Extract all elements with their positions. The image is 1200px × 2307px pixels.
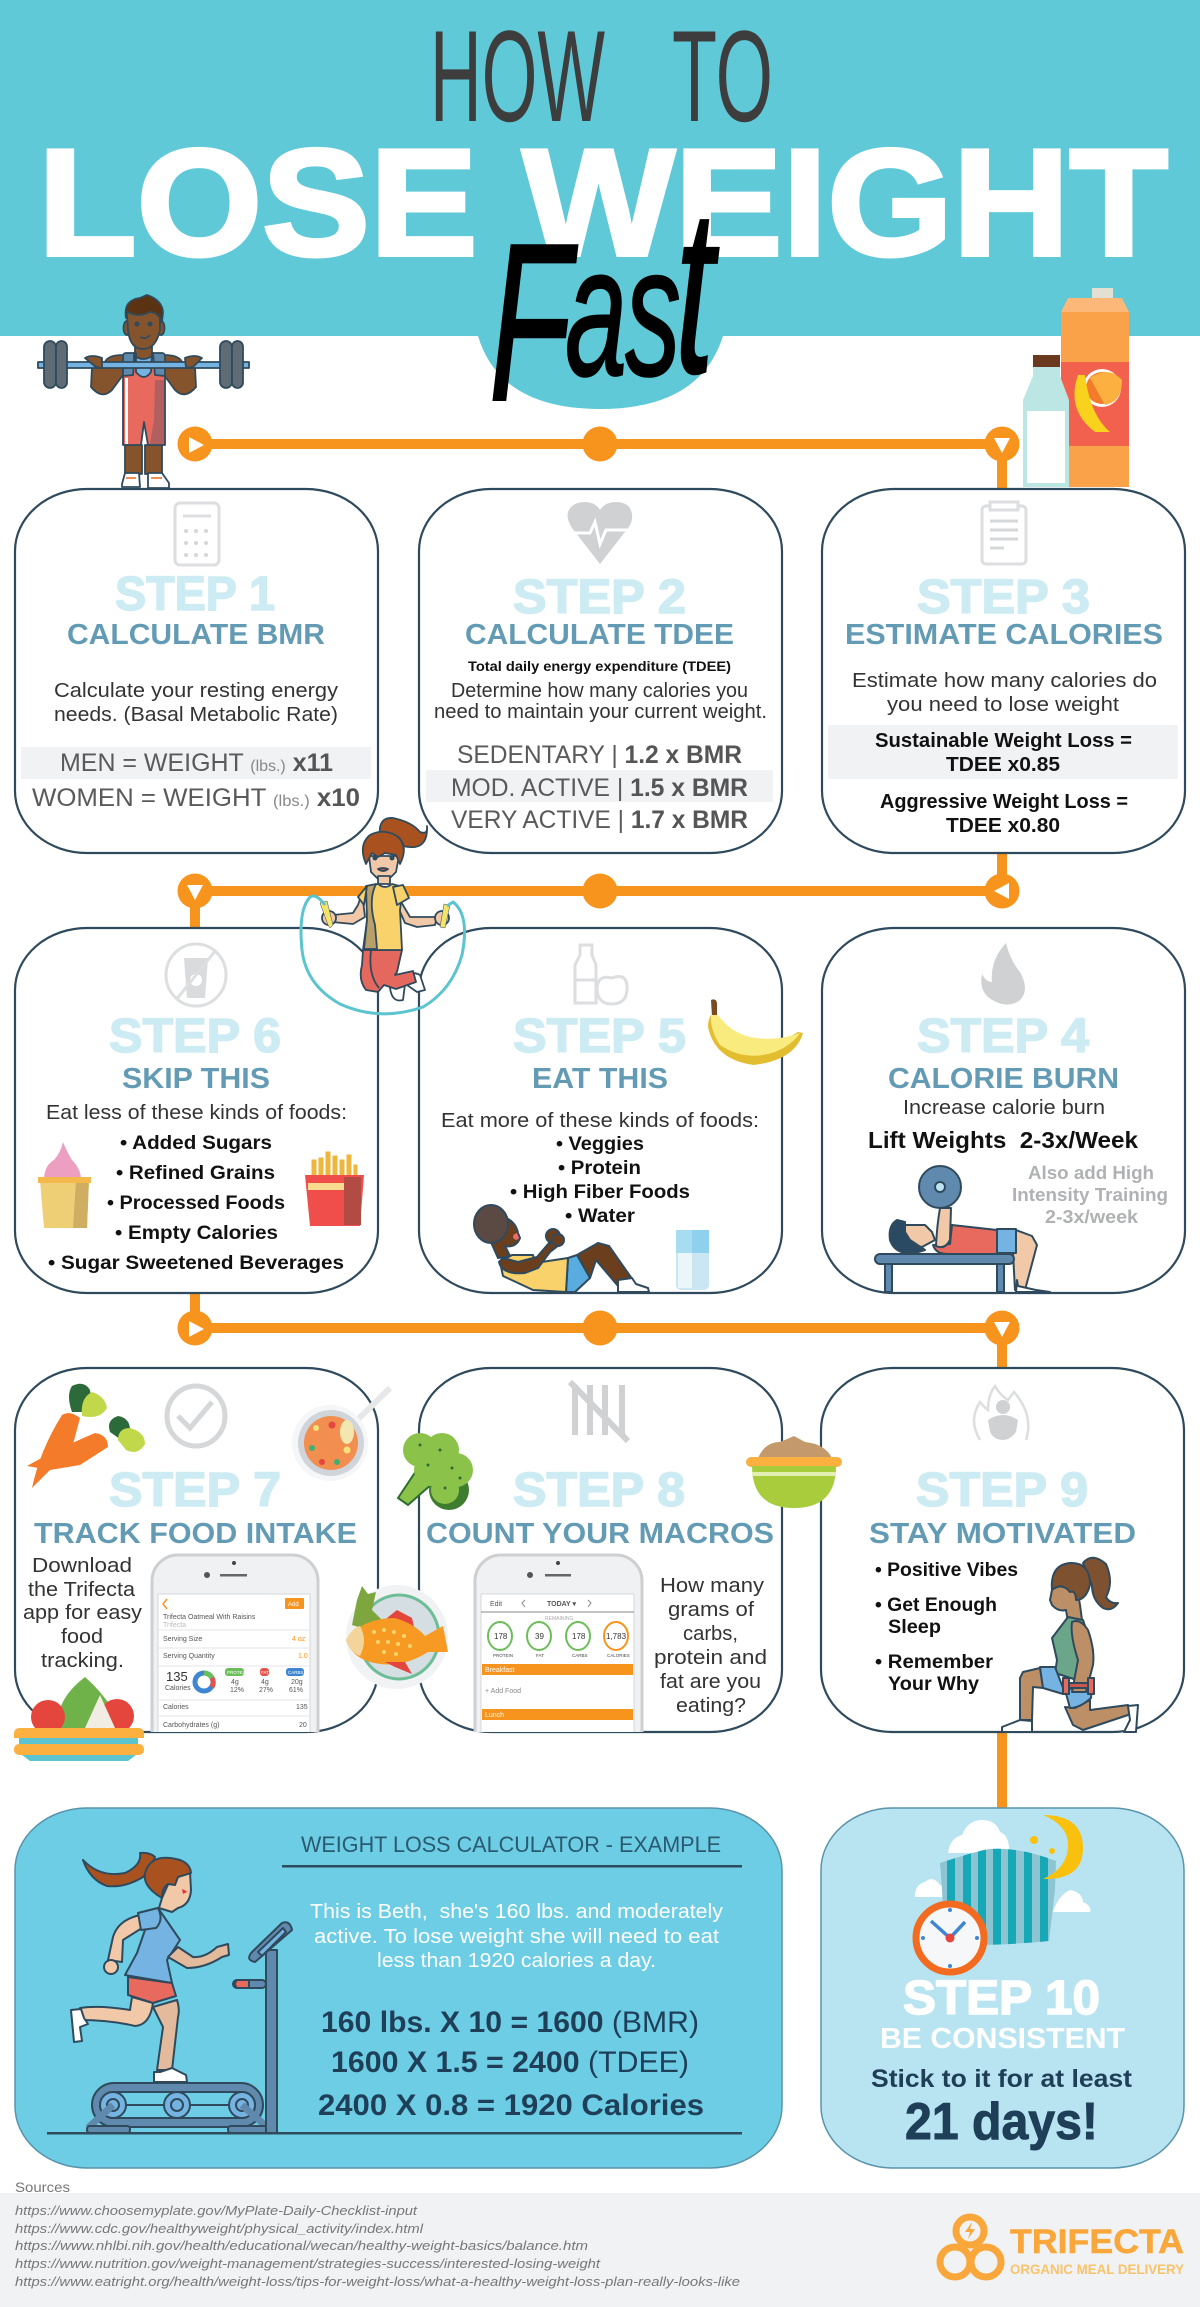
calculation: 1600 X 1.5 = 2400 (TDEE) xyxy=(331,2046,689,2079)
illustration: bench press xyxy=(875,1166,1050,1292)
phone: nutrition screen: 135 xyxy=(166,1669,188,1684)
phone: nutrition screen: Trifecta Oatmeal With Raisins xyxy=(163,1614,256,1621)
header band xyxy=(0,0,1200,409)
illustration: grain bowl xyxy=(746,1436,842,1508)
heading: STAY MOTIVATED xyxy=(869,1518,1136,1550)
description xyxy=(310,1901,723,1972)
icon: fries xyxy=(305,1152,364,1226)
activity multipliers: SEDENTARY | 1.2 x BMR xyxy=(457,741,742,769)
description: needs. (Basal Metabolic Rate) xyxy=(54,704,338,726)
illustration: banana xyxy=(708,999,803,1065)
phone: nutrition screen: CARBS xyxy=(288,1670,304,1675)
icon: check xyxy=(167,1386,225,1446)
description: eating? xyxy=(676,1695,746,1717)
panel: step 5 xyxy=(419,928,782,1293)
panel: step 4 xyxy=(822,928,1185,1293)
icon: flame xyxy=(981,943,1025,1005)
illustration: soup bowl xyxy=(292,1388,390,1481)
phone: macros screen: FAT xyxy=(536,1653,544,1658)
illustration: carrots xyxy=(27,1384,145,1488)
description xyxy=(852,670,1157,716)
phone: nutrition screen: 4g xyxy=(261,1679,269,1686)
phone: macros screen: Lunch xyxy=(485,1712,504,1719)
footer sources: https://www.eatright.org/health/weight-loss/tips-for-weight-loss/what-a-healthy-weight-loss-plan-really-looks-like xyxy=(15,2274,740,2289)
call to action xyxy=(871,2065,1133,2151)
description: food xyxy=(61,1626,103,1648)
illustration: bottle and juice carton xyxy=(1023,288,1129,487)
logo: Trifecta xyxy=(940,2217,1185,2277)
illustration: jump rope girl xyxy=(301,818,465,1014)
illustration: lunge woman xyxy=(1002,1558,1138,1732)
calculation: 2400 X 0.8 = 1920 Calories xyxy=(318,2089,704,2122)
phone: nutrition screen: 1.0 xyxy=(298,1653,308,1660)
description: Total daily energy expenditure (TDEE) xyxy=(468,658,731,674)
heading: SKIP THIS xyxy=(122,1063,270,1095)
description: protein and xyxy=(654,1647,767,1669)
note: Also add High xyxy=(1028,1163,1154,1183)
heading: ESTIMATE CALORIES xyxy=(845,619,1163,651)
phone: nutrition screen: Calories xyxy=(163,1704,189,1711)
step number: STEP 5 xyxy=(513,1010,686,1063)
phone: nutrition screen: PROTEIN xyxy=(227,1670,247,1675)
panel: step 1 xyxy=(15,489,378,853)
tips list: • Positive Vibes xyxy=(875,1560,1018,1581)
food list xyxy=(46,1102,347,1274)
note: 2-3x/week xyxy=(1045,1207,1139,1227)
phone: nutrition screen: 4 oz xyxy=(292,1636,306,1643)
phone: macros screen: 1,783 xyxy=(606,1632,627,1641)
panel: step 3 xyxy=(822,489,1185,853)
heading: CALCULATE TDEE xyxy=(465,619,734,651)
heading: TRACK FOOD INTAKE xyxy=(34,1518,357,1550)
phone: macros screen: TODAY ▾ xyxy=(547,1601,577,1608)
title: TO xyxy=(672,3,773,149)
title: LOSE WEIGHT xyxy=(38,118,1168,288)
icon: bottle and apple xyxy=(575,945,627,1004)
step number: STEP 6 xyxy=(109,1010,281,1063)
phone: nutrition screen: 27% xyxy=(259,1687,273,1694)
heading: CALORIE BURN xyxy=(888,1063,1119,1095)
description: How many xyxy=(660,1575,764,1597)
icon: flame person xyxy=(974,1386,1028,1440)
illustration: broccoli xyxy=(398,1433,473,1510)
footer sources: https://www.nutrition.gov/weight-management/strategies-success/interested-losing-weight xyxy=(15,2256,602,2271)
activity multipliers: VERY ACTIVE | 1.7 x BMR xyxy=(451,806,748,834)
phone: nutrition screen xyxy=(150,1554,320,1732)
tips list: • Remember xyxy=(875,1652,994,1673)
phone: macros screen: PROTEIN xyxy=(493,1653,513,1658)
icon: tally marks xyxy=(570,1382,628,1441)
description: Determine how many calories you xyxy=(451,680,748,702)
icon: calculator xyxy=(175,503,219,565)
title script word: F xyxy=(489,197,578,449)
calculator example panel xyxy=(15,1808,782,2168)
note xyxy=(1012,1163,1168,1227)
title: HOW xyxy=(430,3,605,149)
description: less than 1920 calories a day. xyxy=(377,1950,656,1972)
footer sources: https://www.cdc.gov/healthyweight/physical_activity/index.html xyxy=(15,2221,424,2236)
phone: nutrition screen: 135 xyxy=(296,1704,308,1711)
icon: heart pulse xyxy=(566,502,634,564)
phone: macros screen: 178 xyxy=(494,1632,508,1641)
call to action: 21 days! xyxy=(905,2093,1098,2151)
phone: nutrition screen: Add xyxy=(288,1602,299,1608)
food list: • Empty Calories xyxy=(115,1223,278,1244)
food list: • Refined Grains xyxy=(116,1163,275,1184)
step number: STEP 9 xyxy=(916,1464,1088,1517)
title script word: t xyxy=(675,161,719,423)
weight loss formulas: Aggressive Weight Loss = xyxy=(880,791,1128,813)
phone: nutrition screen: 20 xyxy=(299,1722,307,1729)
description: active. To lose weight she will need to eat xyxy=(314,1926,719,1948)
food list: • Sugar Sweetened Beverages xyxy=(48,1253,344,1274)
description xyxy=(434,658,767,723)
panel: step 8 xyxy=(419,1368,782,1775)
footer sources xyxy=(0,2179,1200,2307)
food list: • Protein xyxy=(558,1158,641,1179)
description: the Trifecta xyxy=(28,1579,136,1601)
panel: step 10 xyxy=(821,1808,1184,2168)
description xyxy=(654,1575,767,1717)
step number: STEP 1 xyxy=(115,568,275,621)
footer sources: Sources xyxy=(15,2179,70,2195)
phone: macros screen: 178 xyxy=(572,1632,586,1641)
description: carbs, xyxy=(683,1623,738,1645)
description: Increase calorie burn xyxy=(903,1097,1105,1119)
description: fat are you xyxy=(660,1671,761,1693)
phone: nutrition screen: Calories xyxy=(165,1685,191,1692)
phone: macros screen: + Add Food xyxy=(485,1688,521,1695)
calculation: 160 lbs. X 10 = 1600 (BMR) xyxy=(321,2006,699,2039)
calculator heading: WEIGHT LOSS CALCULATOR - EXAMPLE xyxy=(301,1832,721,1857)
phone: nutrition screen: FAT xyxy=(261,1670,269,1675)
phone: macros screen: REMAINING xyxy=(545,1616,573,1622)
activity multipliers xyxy=(426,741,773,834)
formula strip xyxy=(21,747,371,812)
footer sources: https://www.choosemyplate.gov/MyPlate-Daily-Checklist-input xyxy=(15,2203,419,2218)
formula strip: WOMEN = WEIGHT (lbs.) x10 xyxy=(32,784,360,812)
food list: Eat more of these kinds of foods: xyxy=(441,1110,759,1132)
phone: macros screen: 39 xyxy=(535,1632,544,1641)
icon: clipboard xyxy=(982,502,1026,564)
step number: STEP 8 xyxy=(513,1464,685,1517)
note: Intensity Training xyxy=(1012,1185,1168,1205)
illustration: pillow, moon and clock xyxy=(915,1815,1090,1972)
illustration: treadmill runner xyxy=(71,1853,292,2133)
tips list: Your Why xyxy=(888,1674,979,1695)
illustration: sit-ups xyxy=(474,1205,649,1292)
illustration: water glass xyxy=(676,1230,709,1290)
phone: nutrition screen: Carbohydrates (g) xyxy=(163,1722,219,1729)
illustration: fish plate xyxy=(346,1585,448,1689)
description xyxy=(868,1097,1138,1153)
heading: CALCULATE BMR xyxy=(67,619,325,651)
formula strip: MEN = WEIGHT (lbs.) x11 xyxy=(60,749,333,777)
phone: macros screen xyxy=(474,1554,644,1732)
heading: BE CONSISTENT xyxy=(880,2023,1125,2055)
panel: step 6 xyxy=(15,928,378,1293)
title script word: a xyxy=(565,209,627,415)
call to action: Stick to it for at least xyxy=(871,2065,1133,2093)
description: Lift Weights 2-3x/Week xyxy=(868,1127,1138,1153)
description: need to maintain your current weight. xyxy=(434,701,767,723)
weight loss formulas: TDEE x0.85 xyxy=(946,754,1060,776)
phone: nutrition screen: 20g xyxy=(291,1679,303,1686)
panel: step 2 xyxy=(419,489,782,853)
icon: ice cream xyxy=(38,1142,91,1228)
footer sources: https://www.nhlbi.nih.gov/health/educational/wecan/healthy-weight-basics/balance.htm xyxy=(15,2238,588,2253)
title xyxy=(38,3,1168,288)
heading: EAT THIS xyxy=(532,1063,668,1095)
description: Estimate how many calories do xyxy=(852,670,1157,692)
title script word: s xyxy=(625,209,681,415)
description: grams of xyxy=(668,1599,754,1621)
food list: Eat less of these kinds of foods: xyxy=(46,1102,347,1124)
tips list: • Get Enough xyxy=(875,1595,997,1616)
description xyxy=(23,1555,142,1672)
phone: nutrition screen: 12% xyxy=(230,1687,244,1694)
phone: nutrition screen: Serving Quantity xyxy=(163,1653,215,1660)
description: tracking. xyxy=(41,1650,124,1672)
icon: no soda xyxy=(166,944,226,1006)
heading: COUNT YOUR MACROS xyxy=(426,1518,774,1550)
description xyxy=(54,680,338,726)
phone: nutrition screen: Trifecta xyxy=(163,1622,186,1629)
food list: • High Fiber Foods xyxy=(510,1182,690,1203)
weight loss formulas xyxy=(828,725,1178,837)
phone: nutrition screen: Serving Size xyxy=(163,1636,202,1643)
step number: STEP 3 xyxy=(917,571,1090,624)
logo: Trifecta: ORGANIC MEAL DELIVERY xyxy=(1010,2261,1185,2277)
food list: • Added Sugars xyxy=(120,1133,272,1154)
step number: STEP 4 xyxy=(917,1010,1089,1063)
description: you need to lose weight xyxy=(887,694,1119,716)
food list xyxy=(441,1110,759,1227)
step number: STEP 7 xyxy=(109,1464,281,1517)
orange connectors xyxy=(178,426,1020,1812)
description: Download xyxy=(32,1555,132,1577)
food list: • Water xyxy=(565,1206,636,1227)
panel: step 7 xyxy=(15,1368,378,1775)
weight loss formulas: Sustainable Weight Loss = xyxy=(875,730,1132,752)
calculation xyxy=(318,2006,704,2122)
illustration: salad bowl xyxy=(14,1677,144,1761)
phone: nutrition screen: 4g xyxy=(231,1679,239,1686)
panel: step 9 xyxy=(821,1368,1184,1732)
tips list xyxy=(875,1560,1018,1695)
step number: STEP 2 xyxy=(513,571,686,624)
step number: STEP 10 xyxy=(903,1972,1100,2025)
food list: • Veggies xyxy=(556,1134,644,1155)
description: Calculate your resting energy xyxy=(54,680,338,702)
weight loss formulas: TDEE x0.80 xyxy=(946,815,1060,837)
phone: macros screen: CARBS xyxy=(572,1653,588,1658)
food list: • Processed Foods xyxy=(107,1193,285,1214)
phone: nutrition screen: 61% xyxy=(289,1687,303,1694)
logo: Trifecta: TRIFECTA xyxy=(1010,2223,1184,2261)
phone: macros screen: Breakfast xyxy=(485,1667,515,1674)
illustration: weightlifter xyxy=(38,295,249,488)
activity multipliers: MOD. ACTIVE | 1.5 x BMR xyxy=(451,774,748,802)
phone: macros screen: Edit xyxy=(490,1601,502,1608)
description: app for easy xyxy=(23,1602,142,1624)
tips list: Sleep xyxy=(888,1617,941,1638)
description: This is Beth, she's 160 lbs. and moderately xyxy=(310,1901,723,1923)
phone: macros screen: CALORIES xyxy=(607,1653,630,1658)
